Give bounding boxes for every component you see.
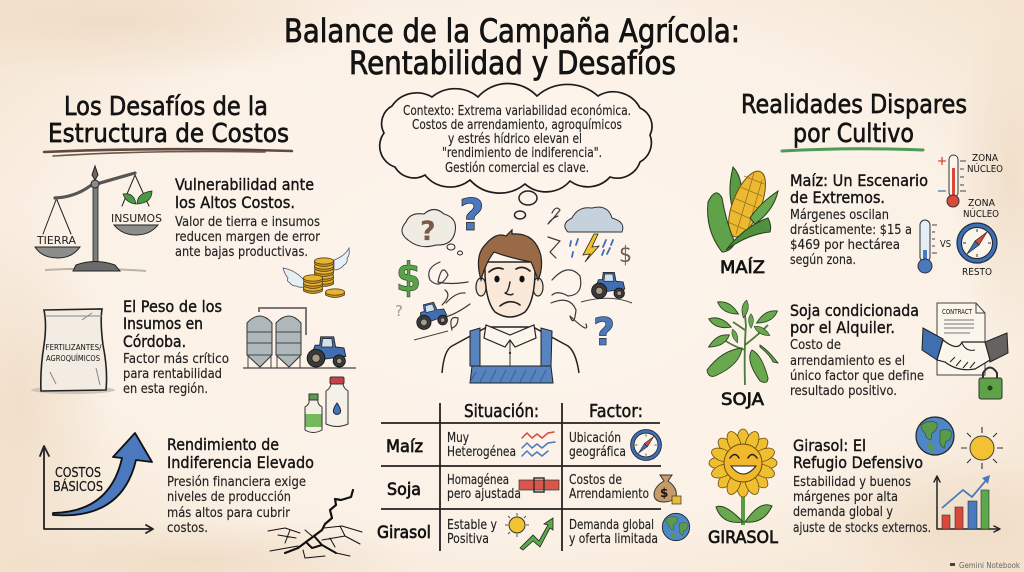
text: vulnerabilidad: reducen margen de error	[175, 229, 320, 245]
text: soja: único factor que define	[790, 368, 924, 384]
icon: thermometers and compass: RESTO	[962, 267, 992, 278]
icon: thought cloud with question mark: ?	[420, 216, 436, 247]
text: soja: por el Alquiler.	[790, 318, 895, 337]
heading: desafíos: Estructura de Costos	[48, 119, 289, 149]
panel: realidades por cultivo	[707, 90, 1008, 548]
icon: soy plant	[707, 299, 779, 410]
title: Balance de la Campaña Agrícola:	[284, 12, 740, 50]
text: insumos en Córdoba: El Peso de los	[123, 297, 222, 316]
icon: smiling sunflower	[708, 429, 778, 548]
text: vulnerabilidad: ante bajas productivas.	[175, 244, 308, 260]
text: girasol: ajuste de stocks externos.	[793, 520, 931, 536]
callout: context cloud: Costos de arrendamiento, agroquímicos	[412, 117, 622, 133]
table: situación y factor: Ubicación	[569, 431, 621, 446]
text: maíz: $469 por hectárea	[790, 237, 900, 253]
icon: left tractor: ?	[395, 302, 403, 320]
icon: thermometers and compass: VS	[940, 239, 951, 250]
text: insumos en Córdoba: para rentabilidad	[123, 366, 222, 382]
text: girasol	[793, 436, 931, 536]
text: rendimiento de indiferencia: Indiferencia Elevado	[167, 453, 314, 472]
text: vulnerabilidad	[175, 175, 320, 260]
text: soja: resultado positivo.	[790, 383, 897, 399]
icon: corn	[708, 166, 778, 278]
table: situación y factor: Soja	[387, 480, 421, 500]
heading: realidades: por Cultivo	[793, 119, 914, 149]
callout: context cloud	[380, 84, 652, 219]
icon: blue question mark right: ?	[593, 310, 615, 354]
table: situación y factor: pero ajustada	[447, 487, 521, 502]
icon: contract handshake and lock: CONTRACT	[942, 308, 973, 316]
text: soja: Soja condicionada	[790, 301, 919, 320]
text: girasol: Estabilidad y buenos	[793, 474, 911, 490]
heading: desafíos: Los Desafíos de la	[64, 92, 268, 122]
icon: corn: MAÍZ	[720, 256, 765, 278]
text: insumos en Córdoba: Factor más crítico	[123, 351, 229, 367]
table: situación y factor: Demanda global	[569, 518, 654, 533]
table: situación y factor: Heterogénea	[447, 445, 516, 460]
text: girasol: Refugio Defensivo	[793, 453, 923, 472]
table: situación y factor: Arrendamiento	[569, 487, 649, 502]
icon: balance scale: INSUMOS	[111, 212, 162, 225]
icon: silos and tractor	[243, 308, 356, 368]
heading: desafíos	[44, 92, 292, 156]
icon: right tractor	[581, 272, 632, 303]
text: soja	[790, 301, 924, 399]
text: insumos en Córdoba: en esta región.	[123, 381, 208, 397]
table: situación y factor: Estable y	[447, 518, 497, 533]
callout: context cloud: Gestión comercial es clave.	[445, 160, 589, 176]
icon: rising cost chart	[40, 433, 153, 533]
icon: globe	[916, 417, 954, 455]
icon: green rising arrow	[520, 518, 553, 550]
icon: thermometers and compass: NÚCLEO	[963, 207, 999, 220]
icon: balance scale	[35, 166, 162, 271]
text: insumos en Córdoba: Insumos en	[123, 314, 203, 333]
heading: realidades: Realidades Dispares	[741, 90, 967, 120]
icon: agrochemical bottles	[305, 377, 348, 432]
icon: contract handshake and lock	[922, 303, 1008, 399]
icon: cracked ground	[268, 490, 362, 558]
icon: thermometers and compass: ZONA	[972, 153, 998, 164]
table: situación y factor	[377, 401, 690, 551]
icon: small globe	[662, 513, 690, 541]
text: girasol: márgenes por alta	[793, 489, 898, 505]
text: vulnerabilidad: Valor de tierra e insumos	[175, 214, 320, 230]
table: situación y factor: geográfica	[569, 445, 626, 460]
callout: context cloud: "rendimiento de indiferencia".	[442, 145, 602, 161]
icon: sun	[961, 427, 1003, 469]
table: situación y factor: Muy	[447, 431, 469, 446]
icon: fertilizer bag	[31, 309, 115, 394]
panel: desafíos de costos	[31, 92, 362, 558]
icon: money bag with lock	[654, 475, 681, 504]
panel: contexto central	[377, 84, 690, 551]
text: maíz: drásticamente: $15 a	[790, 222, 912, 238]
icon: rising cost chart: COSTOS	[55, 465, 101, 481]
text: vulnerabilidad: los Altos Costos.	[175, 193, 295, 212]
text: maíz: de Extremos.	[790, 188, 885, 207]
icon: thought cloud with question mark	[402, 210, 462, 255]
text: soja: arrendamiento es el	[790, 353, 905, 369]
text: rendimiento de indiferencia: Presión financiera exige	[167, 474, 306, 490]
text: soja: Costo de	[790, 337, 841, 353]
text: girasol: demanda global y	[793, 504, 893, 520]
text: maíz: Márgenes oscilan	[790, 207, 889, 223]
icon: flying coins	[283, 248, 349, 298]
icon: storm cloud	[565, 207, 623, 262]
title	[284, 12, 740, 82]
text: insumos en Córdoba: Córdoba.	[123, 332, 186, 351]
icon: fertilizer bag: AGROQUÍMICOS	[46, 354, 100, 363]
icon: rising cost chart: BÁSICOS	[53, 478, 103, 495]
icon: scribbles of worry	[429, 208, 587, 330]
callout: context cloud: Contexto: Extrema variabilidad económica.	[403, 103, 631, 119]
text: maíz: según zona.	[790, 252, 856, 268]
callout: context cloud: y estrés hídrico elevan el	[448, 131, 582, 147]
icon: thermometers and compass: ZONA	[968, 198, 995, 209]
text: rendimiento de indiferencia: niveles de producción	[167, 489, 291, 505]
bar chart	[934, 475, 1000, 532]
icon: fertilizer bag: FERTILIZANTES/	[46, 343, 102, 352]
icon: smiling sunflower: GIRASOL	[708, 528, 778, 548]
text: maíz	[790, 171, 928, 268]
text: rendimiento de indiferencia	[167, 435, 314, 536]
table: situación y factor: y oferta limitada	[569, 532, 658, 547]
text: maíz: Maíz: Un Escenario	[790, 171, 928, 190]
icon: thermometers and compass: NÚCLEO	[967, 162, 1003, 175]
icon: heterogeneous waves	[522, 432, 555, 456]
text: vulnerabilidad: Vulnerabilidad ante	[175, 175, 314, 194]
icon: green dollar: $	[396, 255, 421, 301]
icon: blue question mark top: ?	[459, 190, 485, 241]
icon: worried farmer	[442, 230, 579, 383]
table: situación y factor: Factor:	[589, 401, 643, 422]
heading: realidades	[741, 90, 967, 151]
text: girasol: Girasol: El	[793, 436, 866, 455]
icon: grey dollar: $	[619, 243, 632, 268]
icon: left tractor	[395, 300, 449, 340]
icon: table compass	[631, 430, 661, 460]
text: rendimiento de indiferencia: Rendimiento de	[167, 435, 279, 454]
table: situación y factor: Costos de	[569, 473, 622, 488]
table: situación y factor: Situación:	[464, 401, 539, 422]
icon: smiling sun	[505, 513, 529, 537]
title: Rentabilidad y Desafíos	[349, 44, 676, 82]
text: rendimiento de indiferencia: costos.	[167, 520, 208, 536]
icon: thermometers and compass	[918, 153, 1003, 278]
table: situación y factor: Girasol	[377, 523, 431, 543]
icon: tight belt	[519, 478, 559, 492]
icon: money bag with lock: $	[660, 486, 668, 500]
text: rendimiento de indiferencia: más altos para cubrir	[167, 505, 290, 521]
icon: soy plant: SOJA	[721, 390, 764, 410]
table: situación y factor: Positiva	[447, 532, 489, 547]
table: situación y factor: Maíz	[386, 437, 423, 457]
icon: balance scale: TIERRA	[36, 234, 76, 247]
table: situación y factor: Homagénea	[447, 473, 509, 488]
text: insumos en Córdoba	[123, 297, 229, 397]
